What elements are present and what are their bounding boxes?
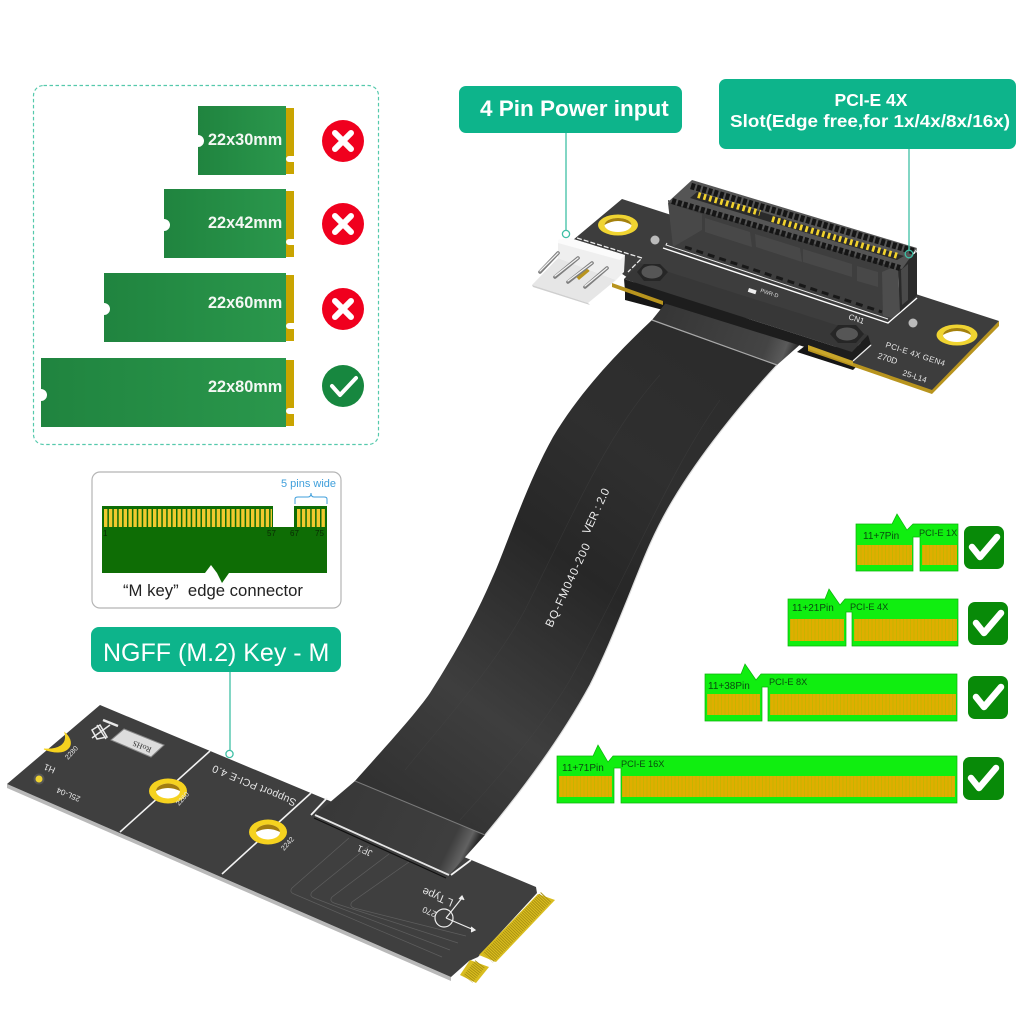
board labels: CN1 bbox=[847, 312, 866, 326]
bar silk bbox=[748, 288, 779, 300]
contact feet bbox=[685, 247, 882, 312]
caption: “M key” edge connector bbox=[123, 581, 303, 600]
card: 22x42mm bbox=[164, 189, 294, 258]
board text: H1 bbox=[42, 762, 57, 775]
board text: JP1 bbox=[356, 843, 374, 858]
check 16X bbox=[963, 757, 1004, 800]
RoHS mark: RoHS bbox=[131, 739, 153, 754]
board text: Support PCI-E 4.0 bbox=[210, 762, 298, 808]
card: 22x60mm: 22x60mm bbox=[208, 294, 282, 312]
panel: M.2 size compatibility bbox=[34, 86, 378, 444]
board labels: PCI-E 4X GEN4 bbox=[884, 340, 947, 368]
board text: 2260 bbox=[175, 791, 191, 807]
label: NGFF (M.2) Key - M: NGFF (M.2) Key - M bbox=[103, 639, 329, 667]
bar silk: PWR-D bbox=[759, 288, 779, 300]
pointer dot on slot bbox=[905, 149, 913, 258]
check 4X bbox=[968, 602, 1008, 645]
annotation: 5 pins wide bbox=[281, 478, 336, 504]
M.2 board bbox=[7, 705, 555, 983]
diagram: M key PCB: 75 bbox=[315, 529, 324, 538]
ribbon text: BQ-FM040-200 bbox=[544, 542, 593, 629]
icon: red cross 22x42mm bbox=[322, 203, 364, 245]
annotation: 5 pins wide: 5 pins wide bbox=[281, 478, 336, 490]
PCIe 16X card: 11+71Pin bbox=[562, 763, 604, 774]
panel: M key edge connector bbox=[92, 472, 341, 608]
label: PCI-E 4X slot bbox=[719, 79, 1016, 149]
check 8X bbox=[968, 676, 1008, 719]
ribbon text bbox=[544, 487, 612, 629]
leader line: 4 Pin Power bbox=[562, 133, 570, 238]
board text bbox=[42, 745, 455, 919]
board edge bbox=[7, 784, 451, 981]
buttons bbox=[637, 264, 668, 281]
silk around cable bbox=[311, 798, 471, 875]
slot front bbox=[668, 200, 902, 318]
card: 22x30mm: 22x30mm bbox=[208, 131, 282, 149]
PCIe 1X card: PCI-E 1X bbox=[919, 528, 957, 538]
4 pin power connector bbox=[532, 238, 625, 305]
pcb bbox=[573, 199, 999, 390]
leader line: NGFF bbox=[226, 672, 233, 758]
diagram: M key PCB bbox=[102, 506, 327, 583]
label: PCI-E 4X slot: PCI-E 4X bbox=[835, 90, 908, 110]
mounting holes bbox=[149, 778, 187, 804]
board labels: 270D bbox=[876, 350, 899, 366]
RoHS mark bbox=[111, 729, 164, 757]
board text: 270 bbox=[421, 905, 438, 919]
base plate bbox=[532, 258, 616, 303]
mounting holes bbox=[598, 214, 638, 236]
icon: red cross 22x30mm bbox=[322, 120, 364, 162]
black underside of edge connector bbox=[797, 342, 865, 370]
ribbon connector at M.2 board bbox=[314, 781, 485, 878]
gold contacts bbox=[698, 195, 760, 213]
board text: 2242 bbox=[280, 836, 296, 852]
traces bbox=[291, 838, 466, 957]
pins bbox=[540, 253, 607, 287]
icon: red cross 22x60mm bbox=[322, 288, 364, 330]
white divider lines bbox=[120, 751, 311, 874]
card: 22x42mm: 22x42mm bbox=[208, 214, 282, 232]
board labels: 25-L14 bbox=[901, 368, 928, 385]
PCIe 16X card: PCI-E 16X bbox=[621, 759, 664, 769]
pcb bbox=[7, 705, 537, 977]
gold board edge bbox=[808, 321, 999, 394]
PCIe 1X card: 11+7Pin bbox=[863, 531, 899, 542]
label: 4 Pin Power input: 4 Pin Power input bbox=[480, 96, 669, 121]
PCIe 4X card bbox=[788, 589, 958, 646]
label: NGFF (M.2) Key - M bbox=[91, 627, 341, 672]
PCIe 16X card bbox=[557, 745, 957, 803]
slot top bbox=[668, 180, 917, 269]
half hole bbox=[44, 733, 70, 752]
board text: 2280 bbox=[64, 745, 80, 761]
board labels bbox=[847, 312, 947, 385]
ribbon fold at top board bbox=[652, 300, 803, 365]
icon: green check 22x80mm bbox=[322, 365, 364, 407]
PCIe slot bbox=[668, 180, 917, 318]
label: PCI-E 4X slot: Slot(Edge free,for 1x/4x/8x/16x) bbox=[730, 111, 1010, 131]
axis icon bbox=[435, 896, 475, 932]
check 1X bbox=[964, 526, 1004, 569]
footprint under pins bbox=[576, 268, 590, 280]
cable clamp bar bbox=[624, 263, 871, 362]
diagram: M key PCB: 1 bbox=[103, 529, 108, 538]
towers bbox=[668, 203, 702, 247]
PCIe 4X card: PCI-E 4X bbox=[850, 602, 888, 612]
housing bbox=[558, 238, 625, 280]
silk outlines bbox=[663, 248, 917, 323]
gold finger long bbox=[479, 894, 555, 962]
diagram: M key PCB: 67 bbox=[290, 529, 299, 538]
gold edge strips bbox=[612, 283, 853, 365]
card: 22x80mm: 22x80mm bbox=[208, 378, 282, 396]
flat ribbon cable bbox=[355, 320, 777, 835]
label: 4 Pin Power input bbox=[459, 86, 682, 133]
ribbon text: VER : 2.0 bbox=[581, 487, 612, 536]
card: 22x80mm bbox=[41, 358, 294, 427]
slot panels bbox=[705, 218, 752, 247]
PCIe 8X card: PCI-E 8X bbox=[769, 677, 807, 687]
board text: 25L-04 bbox=[55, 785, 82, 803]
PCIe 1X card bbox=[856, 514, 958, 571]
PCIe 8X card: 11+38Pin bbox=[708, 681, 750, 692]
diagram: M key PCB: 57 bbox=[267, 529, 276, 538]
card: 22x60mm bbox=[104, 273, 294, 342]
PCIe 8X card bbox=[705, 664, 957, 721]
card: 22x30mm bbox=[198, 106, 294, 175]
PCIe top board bbox=[573, 199, 999, 394]
board text: L Type bbox=[421, 885, 455, 908]
gold finger short bbox=[460, 960, 489, 983]
recycling icon bbox=[92, 720, 118, 739]
PCIe 4X card: 11+21Pin bbox=[792, 603, 834, 614]
